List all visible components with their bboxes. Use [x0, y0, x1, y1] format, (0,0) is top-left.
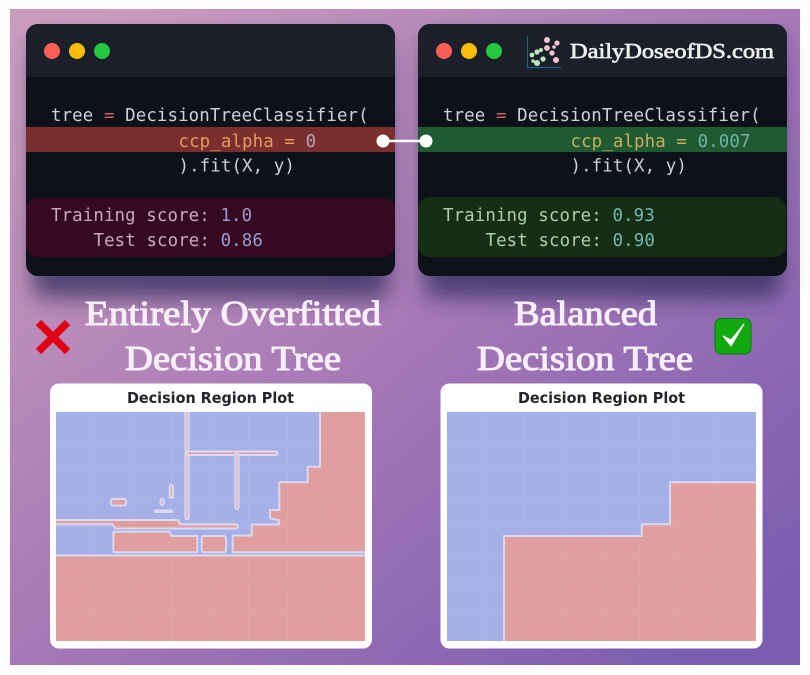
panel: right code window [418, 24, 787, 276]
score panel background [26, 198, 395, 257]
highlighted parameter row [418, 127, 787, 152]
panel: left code window [26, 24, 395, 276]
panel: balanced decision plot [440, 384, 762, 648]
decision regions [447, 412, 758, 643]
heading: overfitted: Entirely Overfitted [85, 294, 382, 333]
code: classifier: tree = DecisionTreeClassifier( [51, 106, 369, 126]
code: fit: ).fit(X, y) [178, 156, 295, 176]
test score: Test score: 0.86 [94, 231, 263, 251]
heading: balanced: Balanced [514, 294, 658, 333]
connector between highlighted rows [376, 134, 432, 148]
icon: DailyDoseofDS logo [528, 36, 561, 68]
panel: overfitted decision plot [50, 384, 372, 648]
decision regions [54, 410, 367, 643]
code: fit: ).fit(X, y) [570, 156, 687, 176]
icon: green check [715, 318, 751, 354]
training score: Training score: 0.93 [443, 206, 655, 226]
icon: red cross [38, 322, 68, 352]
training score: Training score: 1.0 [51, 206, 252, 226]
heading: overfitted [85, 294, 382, 378]
code: ccp_alpha 0.007: ccp_alpha = 0.007 [570, 132, 751, 152]
window title bar [418, 24, 787, 77]
code: ccp_alpha 0: ccp_alpha = 0 [178, 132, 316, 152]
heading: overfitted: Decision Tree [125, 339, 341, 378]
heading: balanced [477, 294, 693, 378]
window controls [436, 43, 502, 59]
highlighted parameter row [26, 127, 395, 152]
brand text: DailyDoseofDS.com [570, 39, 774, 63]
window controls [44, 43, 110, 59]
plot title: Decision Region Plot [127, 389, 294, 407]
window title bar [26, 24, 395, 77]
score panel background [418, 197, 786, 257]
test score: Test score: 0.90 [486, 231, 655, 251]
code: classifier: tree = DecisionTreeClassifier( [443, 106, 761, 126]
heading: balanced: Decision Tree [477, 339, 693, 378]
window shadows [32, 40, 781, 298]
plot title: Decision Region Plot [518, 389, 685, 407]
